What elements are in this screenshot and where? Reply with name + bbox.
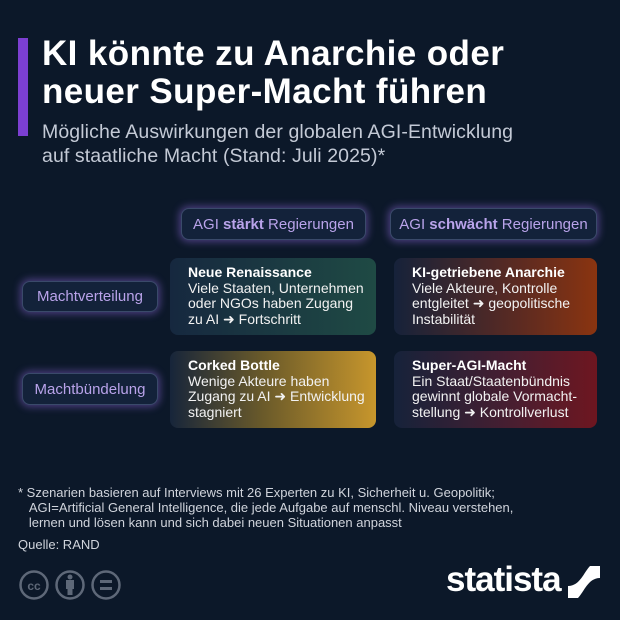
column header: schwächt — [390, 208, 597, 240]
subtitle — [42, 121, 513, 167]
source: Quelle: RAND — [18, 537, 100, 552]
card: Corked Bottle: stagniert — [188, 404, 242, 420]
card: Super-AGI-Macht: stellung ➜ Kontrollverlust — [412, 404, 568, 420]
card: KI-getriebene Anarchie — [394, 258, 597, 335]
column header: schwächt: schwächt — [429, 216, 498, 232]
subtitle: Mögliche Auswirkungen der globalen AGI-Entwicklung — [42, 121, 513, 143]
card: Corked Bottle — [170, 351, 376, 428]
footnote: lernen und lösen kann und sich dabei neuen Situationen anpasst — [29, 515, 402, 530]
footnote: * Szenarien basieren auf Interviews mit 26 Experten zu KI, Sicherheit u. Geopolitik; — [18, 485, 495, 500]
column header: stärkt: stärkt — [223, 216, 264, 232]
row label: Machtverteilung: Machtverteilung — [37, 288, 143, 305]
column header: stärkt — [181, 208, 366, 240]
card: Neue Renaissance: Neue Renaissance — [188, 264, 312, 280]
footnote: AGI=Artificial General Intelligence, die jede Aufgabe auf menschl. Niveau verstehen, — [29, 500, 513, 515]
card: Corked Bottle: Zugang zu AI ➜ Entwicklung — [188, 388, 365, 404]
row label: Machtverteilung — [22, 281, 158, 312]
card: Neue Renaissance: zu AI ➜ Fortschritt — [188, 310, 301, 326]
icons: license: cc — [27, 579, 41, 593]
icons: license — [19, 570, 121, 600]
card: Super-AGI-Macht: Ein Staat/Staatenbündnis — [412, 372, 570, 388]
title: KI könnte zu Anarchie oder — [42, 34, 504, 73]
column header: schwächt: AGI Regierungen — [399, 216, 588, 232]
column header: stärkt: AGI Regierungen — [193, 216, 354, 232]
card: Neue Renaissance: Viele Staaten, Unternehmen — [188, 280, 364, 296]
row label: Machtbündelung: Machtbündelung — [35, 380, 145, 398]
footnote — [18, 485, 513, 530]
row label: Machtbündelung — [22, 373, 158, 405]
card: Super-AGI-Macht — [394, 351, 597, 428]
card: KI-getriebene Anarchie: Viele Akteure, Kontrolle — [412, 280, 557, 296]
card: Corked Bottle: Corked Bottle — [188, 357, 280, 373]
statista logo: statista — [446, 560, 561, 599]
card: KI-getriebene Anarchie: Instabilität — [412, 310, 475, 326]
card: Corked Bottle: Wenige Akteure haben — [188, 372, 329, 388]
title — [42, 34, 504, 111]
card: Neue Renaissance — [170, 258, 376, 335]
card: KI-getriebene Anarchie: KI-getriebene Anarchie — [412, 264, 565, 280]
title accent bar — [18, 38, 28, 136]
card: KI-getriebene Anarchie: entgleitet ➜ geopolitische — [412, 295, 570, 311]
card: Super-AGI-Macht: gewinnt globale Vormacht- — [412, 388, 577, 404]
card: Neue Renaissance: oder NGOs haben Zugang — [188, 295, 353, 311]
subtitle: auf staatliche Macht (Stand: Juli 2025)* — [42, 145, 385, 167]
card: Super-AGI-Macht: Super-AGI-Macht — [412, 357, 526, 373]
title: neuer Super-Macht führen — [42, 72, 487, 111]
